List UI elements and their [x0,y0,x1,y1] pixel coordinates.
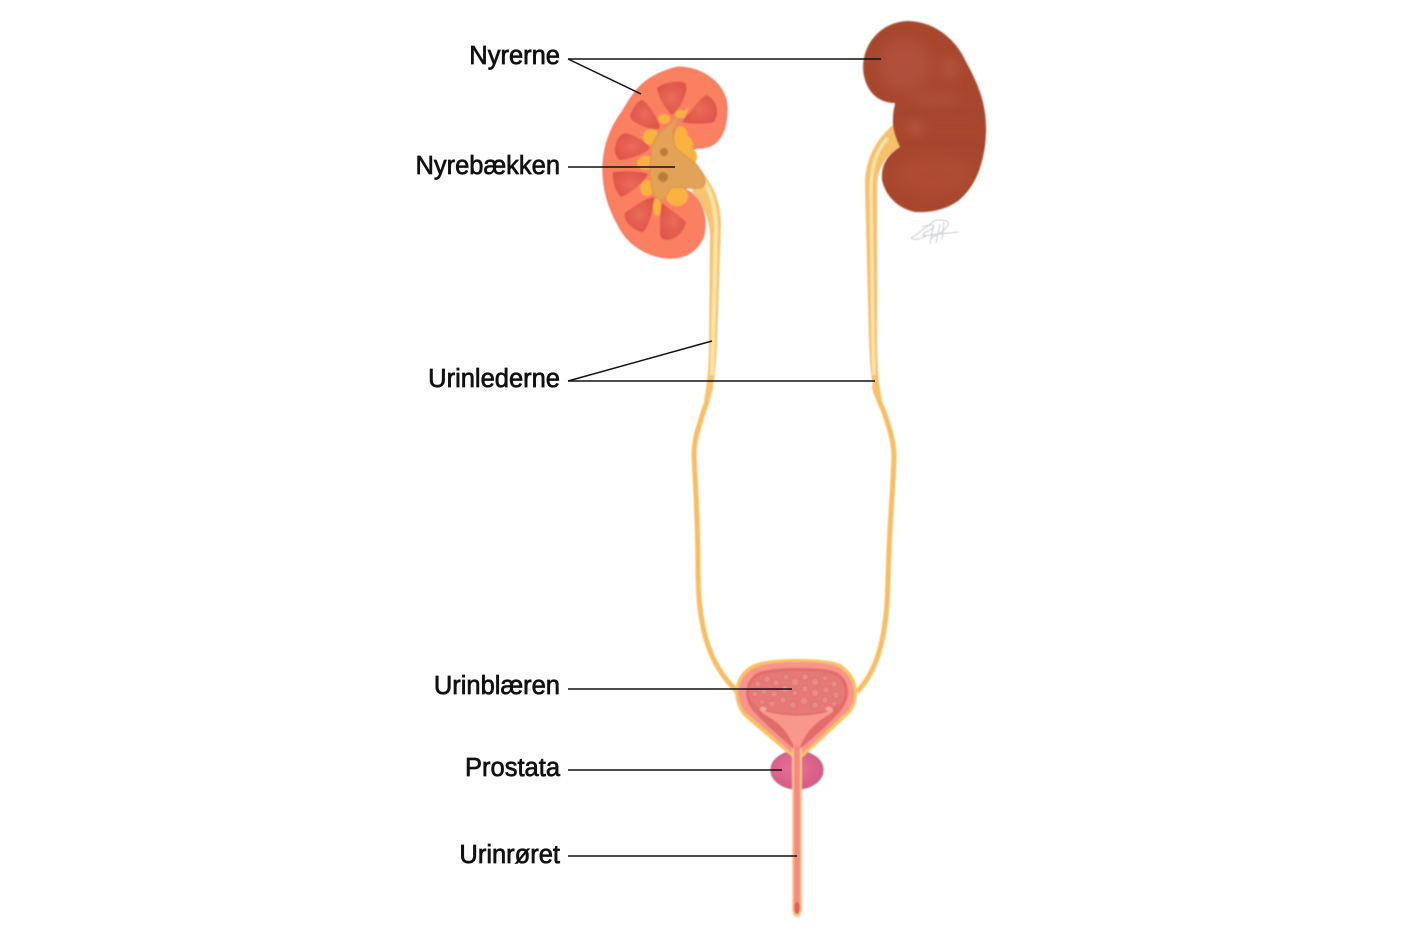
label: Urinlederne: Urinlederne [428,365,560,393]
ureter: left [692,167,738,692]
kidney cortex [603,67,727,258]
bladder upper lining [749,671,845,715]
leader line: Nyrebaekken [568,166,675,168]
bladder lining [746,668,848,750]
label: Nyrerne: Nyrerne [469,42,560,70]
leader line: Urinblaeren [568,688,792,690]
bladder trigone [760,709,834,750]
kidney shading [879,39,985,195]
urethra [792,746,802,917]
label: Nyrebækken: Nyrebækken [415,152,560,180]
bladder outer wall [735,659,857,757]
prostate [771,751,823,789]
label: Prostata: Prostata [465,754,561,782]
bladder texture [752,674,840,708]
kidney pyramids [613,82,717,240]
ureter: right [857,124,901,692]
leader lines: Urinlederne [568,341,875,381]
artist signature [911,220,958,244]
kidney: exterior (right) [863,21,986,244]
leader lines: Nyrerne [568,59,881,94]
leader line: Urinroeret [568,855,797,857]
kidney pelvis [650,118,705,201]
urinary bladder [735,659,857,757]
kidney: cross-section (left) [603,67,727,258]
kidney fat [637,106,697,216]
leader line: Prostata [568,769,782,771]
label: Urinblæren: Urinblæren [434,672,560,700]
label: Urinrøret: Urinrøret [459,841,560,869]
